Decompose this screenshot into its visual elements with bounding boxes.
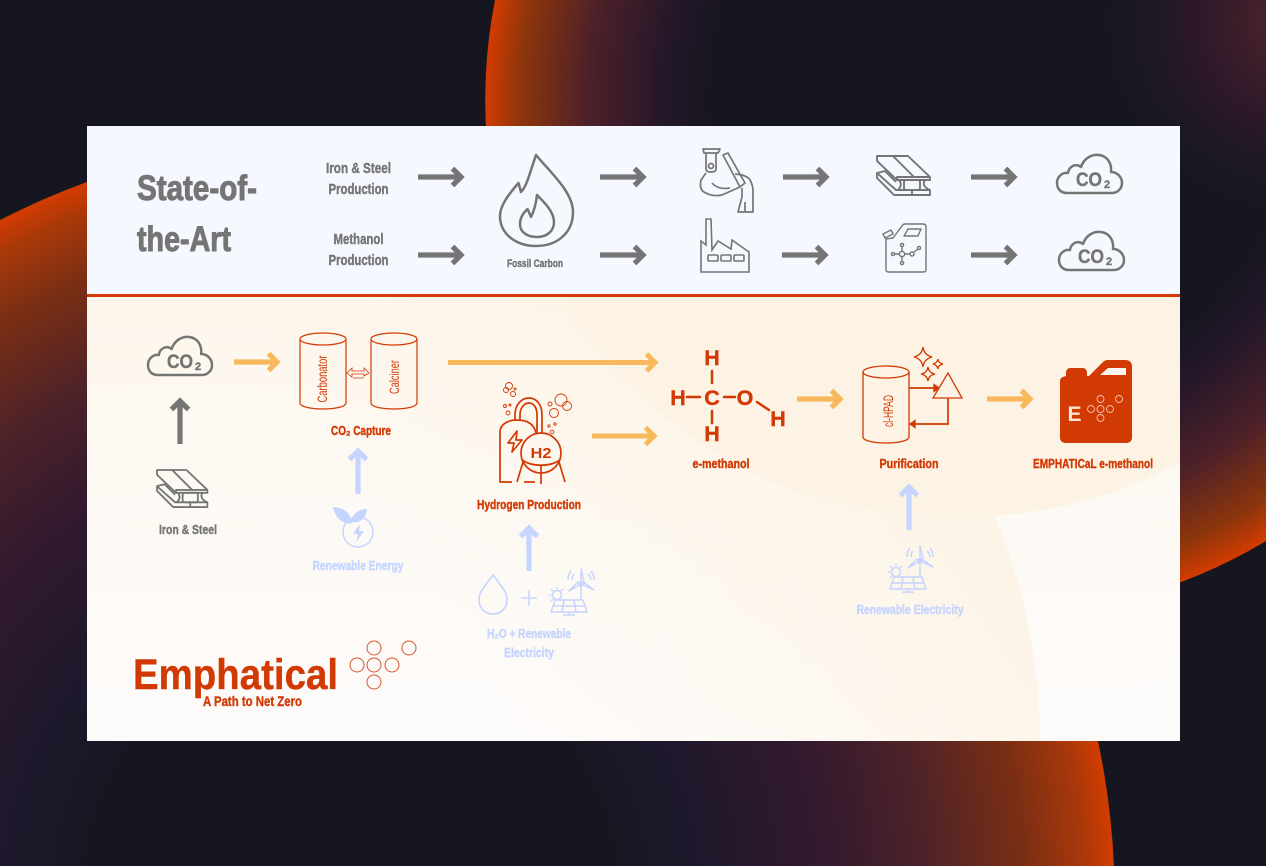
icon: solar panel and wind turbine, purification xyxy=(888,546,933,592)
label: Purification: Purification xyxy=(880,456,939,471)
icon: iron and steel beam xyxy=(157,470,207,507)
icon: CO2 cloud, iron and steel row: 2 xyxy=(1104,179,1110,191)
icon: CO2 cloud, methanol row: CO xyxy=(1078,247,1104,268)
icon: carbonator and calciner cylinders: Calciner xyxy=(386,360,402,394)
icon: CO2 cloud, iron and steel row xyxy=(1057,155,1122,193)
icon: steel beam xyxy=(877,156,930,195)
icon: CO2 cloud, pathway source: 2 xyxy=(195,361,201,373)
arrow: renewable electricity to purification xyxy=(900,486,918,530)
icon: plus xyxy=(521,590,537,606)
label: Hydrogen Production: Hydrogen Production xyxy=(477,497,581,512)
icon: CO2 cloud, methanol row: 2 xyxy=(1106,256,1112,268)
icon: hydrogen production tank: H2 xyxy=(530,445,552,462)
logo: Emphatical: Emphatical xyxy=(133,651,338,699)
icon: CO2 cloud, pathway source: CO xyxy=(167,352,193,373)
icon: carbonator and calciner cylinders xyxy=(300,333,417,409)
label: e-methanol: e-methanol xyxy=(692,456,750,471)
icon: factory xyxy=(701,219,749,272)
arrow: renewable energy to capture xyxy=(350,450,366,494)
arrow: capture to e-methanol xyxy=(448,354,655,371)
arrow: water and electricity to hydrogen xyxy=(520,527,538,571)
heading: State-of-the-Art xyxy=(137,169,257,259)
icon: methanol molecule: H xyxy=(704,346,720,370)
icon: purification column with recycle xyxy=(863,347,962,443)
icon: CO2 cloud, methanol row xyxy=(1059,232,1124,270)
label: Renewable Electricity: Renewable Electricity xyxy=(856,602,964,617)
arrow: hydrogen to e-methanol xyxy=(592,428,654,444)
label: Iron & Steel: Iron & Steel xyxy=(159,522,217,537)
icon: water drop xyxy=(479,575,507,614)
arrow: CO2 to capture xyxy=(234,354,278,370)
heading: State-of-the-Art: the-Art xyxy=(137,220,231,259)
icon: methanol molecule xyxy=(670,346,786,446)
label: Renewable Energy: Renewable Energy xyxy=(312,558,404,573)
logo: Emphatical: A Path to Net Zero xyxy=(203,693,302,709)
arrow: iron and steel up to CO2 xyxy=(172,400,188,444)
row labels: methanol production: Methanol xyxy=(334,232,384,248)
arrow: e-methanol to purification xyxy=(797,390,841,408)
heading: State-of-the-Art: State-of- xyxy=(137,169,257,208)
icon: steel ladle xyxy=(700,149,753,212)
icon: CO2 cloud, pathway source xyxy=(148,337,212,375)
icon: methanol molecule: O xyxy=(737,386,753,410)
arrow: purification to final product xyxy=(987,390,1031,408)
icon: purification column with recycle: cl-HPAD xyxy=(880,395,896,427)
icon: CO2 cloud, iron and steel row: CO xyxy=(1076,170,1102,191)
icon: methanol molecule: H xyxy=(670,386,686,410)
icon: canister with molecule xyxy=(883,224,926,272)
row labels: iron and steel production xyxy=(326,161,391,198)
row labels: iron and steel production: Iron & Steel xyxy=(326,161,391,177)
icon: carbonator and calciner cylinders: Carbonator xyxy=(314,355,330,402)
row labels: methanol production: Production xyxy=(328,253,388,269)
icon: fossil carbon flame xyxy=(500,155,573,246)
icon: methanol molecule: H xyxy=(704,422,720,446)
label: H2O + Renewable Electricity: Electricity xyxy=(504,645,555,660)
icon: methanol molecule: C xyxy=(704,386,720,410)
icon: e-methanol jerry can xyxy=(1060,360,1132,443)
row labels: iron and steel production: Production xyxy=(328,182,388,198)
panel: emphatical pathway background xyxy=(87,297,1180,741)
label: CO2 Capture: CO₂ Capture xyxy=(331,423,391,438)
row labels: methanol production xyxy=(328,232,388,269)
label: H2O + Renewable Electricity xyxy=(487,626,571,660)
divider line xyxy=(87,294,1180,297)
icon: methanol molecule: H xyxy=(770,407,786,431)
logo: Emphatical xyxy=(133,641,416,709)
arrows: state-of-the-art flow xyxy=(418,168,1015,264)
icon: renewable energy leaf and bolt xyxy=(333,507,373,547)
icon: solar panel and wind turbine xyxy=(549,569,594,615)
label: Fossil Carbon: Fossil Carbon xyxy=(507,258,563,270)
panel: state-of-the-art background xyxy=(87,126,1180,294)
icon: e-methanol jerry can: E xyxy=(1067,403,1082,426)
label: H2O + Renewable Electricity: H₂O + Renewable xyxy=(487,626,571,641)
label: EMPHATICaL e-methanol: EMPHATICaL e-methanol xyxy=(1033,456,1153,471)
icon: hydrogen production tank xyxy=(500,382,572,484)
